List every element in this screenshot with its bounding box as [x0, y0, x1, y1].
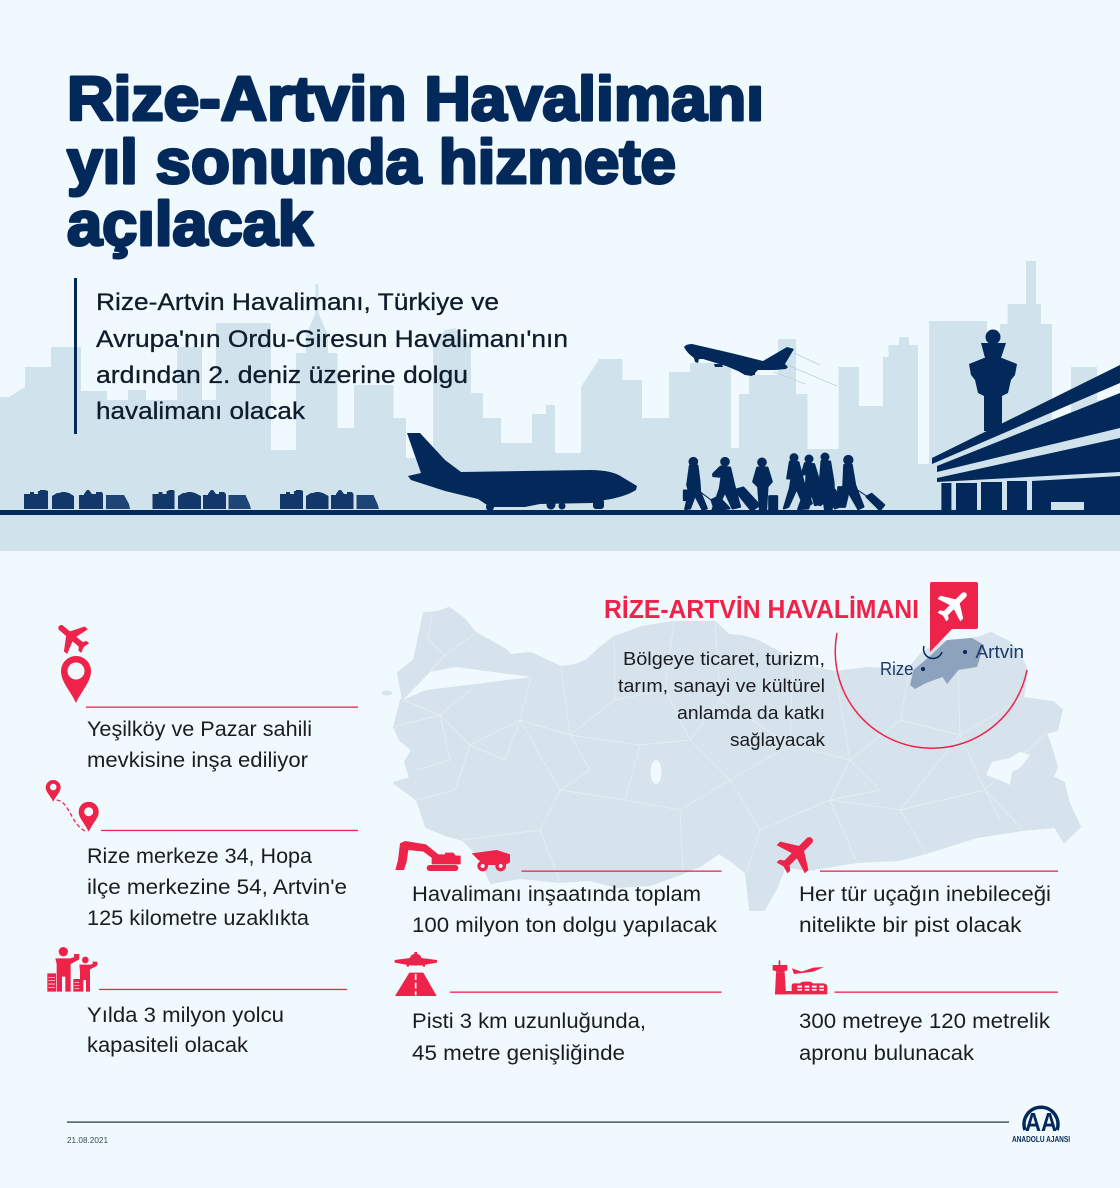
icon: tower, plane and terminal [773, 960, 827, 994]
intro text with vertical bar: ardından 2. deniz üzerine dolgu [96, 362, 468, 389]
icon: excavator and dump truck [395, 841, 510, 871]
map labels: Rize [880, 659, 914, 679]
logo: Anadolu Ajansı: AA [1025, 1107, 1057, 1137]
map labels [880, 642, 1024, 679]
fact: runway capability: Her tür uçağın inebileceği [799, 883, 1051, 906]
regional contribution text: sağlayacak [730, 729, 826, 750]
date: 21.08.2021 [67, 1135, 108, 1145]
province borders [394, 615, 1046, 882]
intro text with vertical bar: Rize-Artvin Havalimanı, Türkiye ve [96, 289, 499, 316]
ground line [0, 510, 1120, 515]
fact: apron [773, 960, 1058, 1065]
logo: Anadolu Ajansı [1012, 1107, 1070, 1144]
map of Turkey [382, 608, 1080, 910]
Rize-Artvin region [910, 638, 984, 689]
city skyline background [0, 261, 1120, 551]
fact: land fill: Havalimanı inşaatında toplam [412, 883, 701, 906]
fact: apron: apronu bulunacak [799, 1042, 975, 1065]
fact: runway capability [769, 825, 1058, 937]
intro text with vertical bar: havalimanı olacak [96, 398, 306, 425]
fact: runway capability: nitelikte bir pist olacak [799, 914, 1022, 937]
airport terminal [932, 365, 1120, 510]
heading: airport name: RİZE-ARTVİN HAVALİMANI [604, 596, 919, 624]
fact: passenger capacity: Yılda 3 milyon yolcu [87, 1004, 284, 1027]
control tower [969, 330, 1017, 431]
fact: passenger capacity [47, 947, 347, 1057]
regional contribution text: Bölgeye ticaret, turizm, [623, 648, 825, 669]
fact: distance [46, 780, 358, 930]
fact: runway size: 45 metre genişliğinde [412, 1042, 625, 1065]
regional contribution text: tarım, sanayi ve kültürel [618, 675, 825, 696]
magnifier arc [835, 633, 1027, 748]
fact: land fill [395, 841, 722, 937]
fact: distance: Rize merkeze 34, Hopa [87, 845, 312, 868]
title: Rize-Artvin Havalimanı [67, 65, 764, 134]
baggage carts [24, 490, 379, 509]
icon: airport map pin [930, 582, 978, 652]
fact: runway size: Pisti 3 km uzunluğunda, [412, 1010, 646, 1033]
airport marker ring [924, 646, 942, 658]
icon: plane over runway [395, 952, 437, 996]
fact: location [49, 614, 358, 772]
title [67, 65, 764, 259]
regional contribution text: anlamda da katkı [677, 702, 825, 723]
airport skyline illustration [0, 261, 1120, 551]
icon: travelers with suitcases [47, 947, 97, 992]
map labels: Artvin [976, 642, 1024, 662]
icon: plane and pin [49, 614, 95, 703]
fact: runway size [395, 952, 722, 1065]
regional contribution text [618, 648, 826, 750]
title: yıl sonunda hizmete [67, 128, 676, 197]
fact: apron: 300 metreye 120 metrelik [799, 1010, 1051, 1033]
intro text with vertical bar [74, 278, 568, 434]
icon: route pins [46, 780, 99, 832]
Gökçeada island [382, 690, 392, 696]
fact: passenger capacity: kapasiteli olacak [87, 1034, 249, 1057]
fact: location: Yeşilköy ve Pazar sahili [87, 718, 312, 741]
airplane taking off [684, 344, 837, 386]
icon: plane [769, 825, 825, 881]
intro text with vertical bar: Avrupa'nın Ordu-Giresun Havalimanı'nın [96, 326, 568, 353]
fact: location: mevkisine inşa ediliyor [87, 749, 308, 772]
Sea of Marmara [403, 667, 531, 700]
Lake Van [986, 752, 1030, 785]
title: açılacak [67, 190, 314, 259]
parked airplane [407, 433, 637, 511]
passengers with luggage [684, 454, 884, 511]
Lake Tuz [650, 760, 662, 784]
fact: distance: ilçe merkezine 54, Artvin'e [87, 876, 347, 899]
logo: Anadolu Ajansı: ANADOLU AJANSI [1012, 1134, 1070, 1144]
fact: distance: 125 kilometre uzaklıkta [87, 907, 309, 930]
footer rule [67, 1122, 1009, 1123]
fact: land fill: 100 milyon ton dolgu yapılacak [412, 914, 718, 937]
